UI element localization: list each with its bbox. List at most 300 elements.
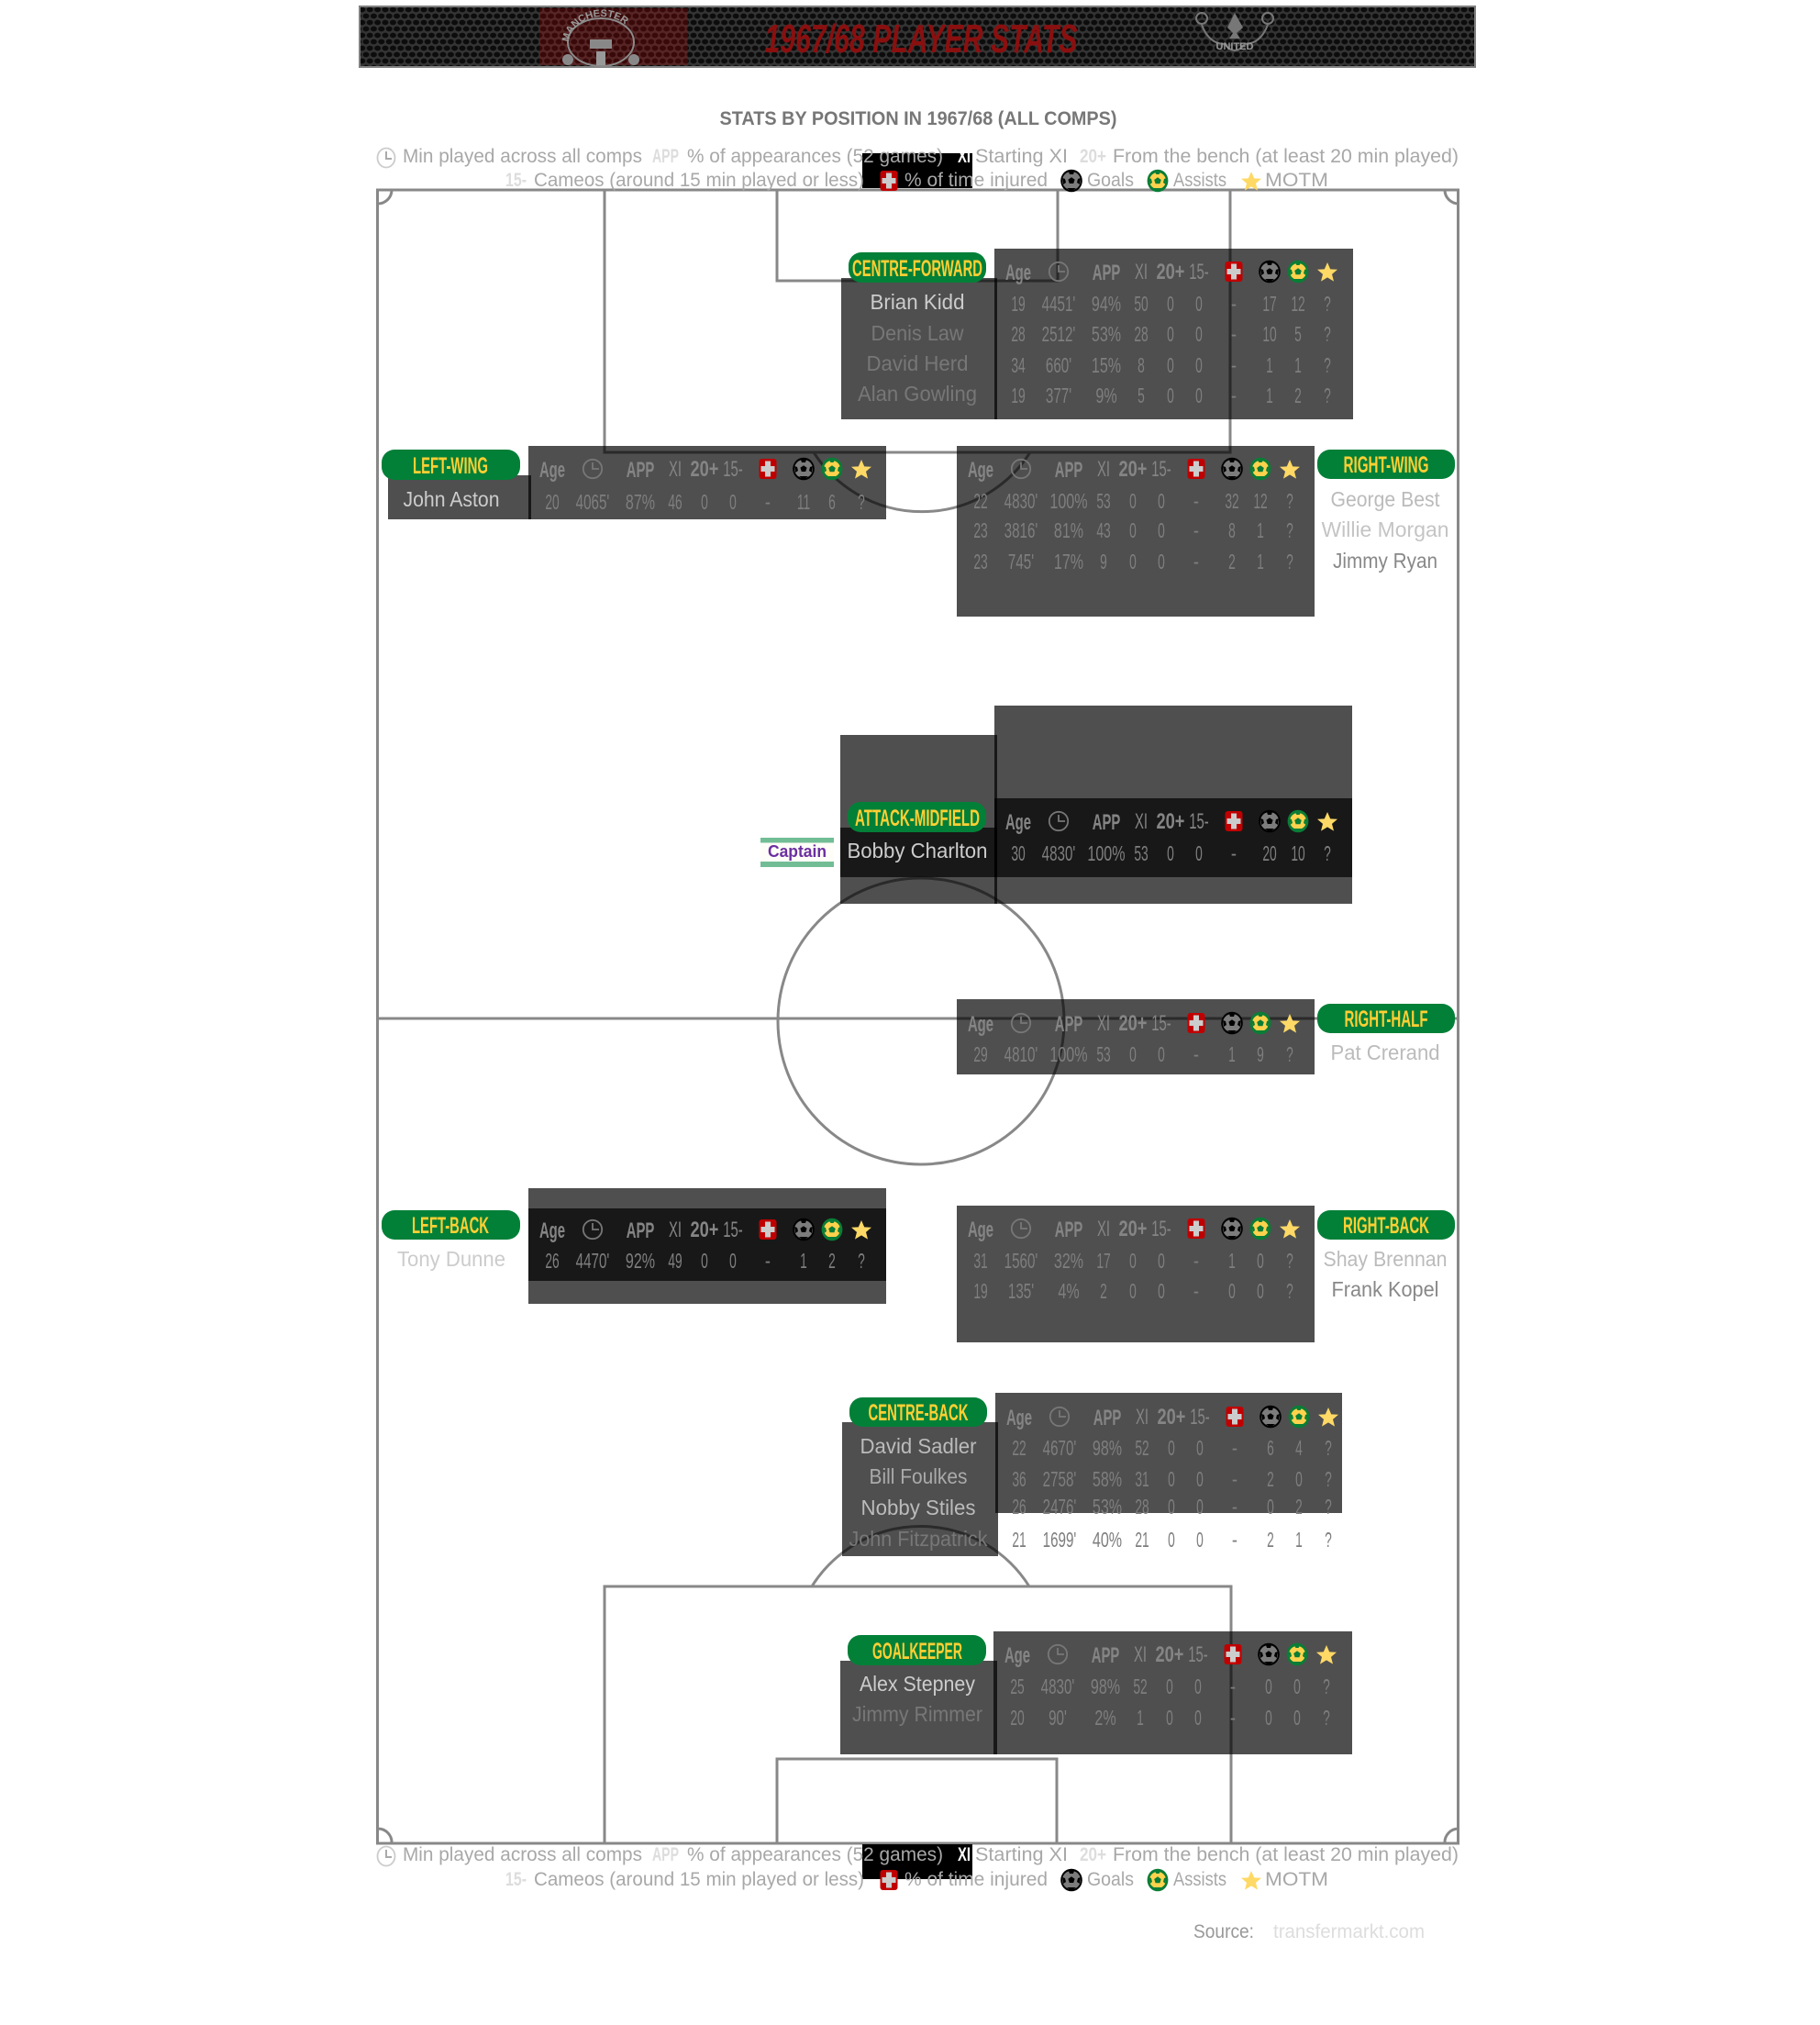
stats rows: 17 xyxy=(1096,1251,1111,1274)
stats row xyxy=(545,1250,865,1274)
stats rows: 0 xyxy=(1167,385,1174,408)
legend: top: Goals xyxy=(1087,170,1134,191)
stats rows: ? xyxy=(1286,491,1293,514)
stats row: 0 xyxy=(729,1251,737,1274)
stats header: 20+ xyxy=(691,1218,718,1242)
legend: top: Starting XI xyxy=(975,146,1068,167)
panel: centre-forward xyxy=(841,249,1353,419)
stats rows: 2758' xyxy=(1043,1468,1076,1492)
stats rows xyxy=(1010,1675,1330,1730)
player names: David Sadler xyxy=(860,1434,977,1458)
stats header: Age xyxy=(968,459,993,483)
legend: top: APP xyxy=(652,146,679,167)
stats header xyxy=(539,1218,871,1243)
stats header: 15- xyxy=(1189,261,1209,284)
stats rows xyxy=(1011,293,1331,408)
stats header xyxy=(1005,809,1337,835)
player names xyxy=(858,290,977,406)
stats rows: 1 xyxy=(1266,385,1273,408)
legend: top: 20+ xyxy=(1080,146,1106,167)
position pill xyxy=(382,1210,520,1240)
stats rows: 0 xyxy=(1195,294,1203,317)
stats header: Age xyxy=(1005,811,1031,835)
stats rows: 100% xyxy=(1049,490,1088,514)
captain badge: Captain xyxy=(768,842,827,861)
stats panel xyxy=(994,249,1353,419)
stats rows: 135' xyxy=(1008,1280,1034,1304)
stats row: 4830' xyxy=(1042,842,1075,866)
stats rows: 0 xyxy=(1195,324,1203,347)
player name: Pat Crerand xyxy=(1330,1040,1440,1064)
stats rows: 22 xyxy=(1012,1438,1027,1461)
icon: United crest xyxy=(1196,13,1273,52)
position pill: LEFT-BACK xyxy=(412,1213,489,1239)
icon: United crest: UNITED xyxy=(1216,41,1254,52)
player names: Bill Foulkes xyxy=(870,1464,967,1488)
stats rows: ? xyxy=(1323,1676,1330,1699)
player names: Jimmy Rimmer xyxy=(852,1702,982,1726)
stats rows: 6 xyxy=(1267,1438,1274,1461)
stats header: APP xyxy=(1055,1013,1082,1037)
stats header: Age xyxy=(968,1218,993,1242)
stats rows: 1 xyxy=(1295,1530,1303,1552)
legend: bottom: APP xyxy=(652,1844,679,1865)
stats rows xyxy=(1012,1437,1332,1552)
legend: bottom: Cameos (around 15 min played or less) xyxy=(534,1869,864,1890)
stats rows: - xyxy=(1232,1529,1237,1552)
stats header: APP xyxy=(1093,811,1120,835)
player names xyxy=(1321,487,1449,573)
stats header xyxy=(968,1217,1300,1242)
stats rows: - xyxy=(1230,1675,1236,1699)
stats header: 20+ xyxy=(1119,1217,1147,1241)
player names: David Herd xyxy=(866,351,969,375)
stats row: 20 xyxy=(1262,843,1277,866)
legend: top: 15- xyxy=(505,170,527,191)
stats rows: 1 xyxy=(1257,551,1264,574)
stats rows: 0 xyxy=(1195,355,1203,378)
stats row: ? xyxy=(1286,1044,1293,1067)
stats header xyxy=(1005,260,1337,285)
source credit: transfermarkt.com xyxy=(1273,1921,1425,1942)
stats row: 1 xyxy=(800,1251,807,1274)
stats rows: 32 xyxy=(1225,491,1239,514)
player names panel xyxy=(388,475,531,519)
position pill xyxy=(848,1635,986,1665)
stats row: 53 xyxy=(1134,843,1149,866)
stats header: XI xyxy=(1135,261,1148,284)
highlight band: name xyxy=(840,828,997,877)
legend: bottom: From the bench (at least 20 min played) xyxy=(1113,1844,1459,1865)
stats rows: ? xyxy=(1286,1251,1293,1274)
stats rows: ? xyxy=(1325,1438,1332,1461)
stats rows: 0 xyxy=(1168,1530,1175,1552)
stats rows: 2 xyxy=(1267,1469,1274,1492)
stats rows: 2512' xyxy=(1042,323,1075,347)
stats row: - xyxy=(1231,842,1237,866)
stats header: 15- xyxy=(1189,810,1209,834)
stats row: - xyxy=(765,491,771,515)
stats rows: ? xyxy=(1324,385,1331,408)
legend: top: % of appearances (52 games) xyxy=(687,146,943,167)
stats rows: 28 xyxy=(1135,1496,1149,1519)
stats rows: 0 xyxy=(1167,355,1174,378)
stats rows: 0 xyxy=(1167,324,1174,347)
legend: top: % of time injured xyxy=(904,170,1048,191)
stats header: APP xyxy=(1092,1644,1119,1668)
stats header: 20+ xyxy=(1119,1011,1147,1036)
stats row: ? xyxy=(858,1251,865,1274)
panel: goalkeeper xyxy=(840,1631,1352,1754)
stats rows: 26 xyxy=(1012,1496,1027,1519)
stats header xyxy=(539,457,871,483)
stats row xyxy=(973,1043,1293,1067)
position pill xyxy=(1317,1210,1455,1240)
legend: top xyxy=(378,146,1459,192)
stats row: 0 xyxy=(1158,1044,1165,1067)
stats rows: 0 xyxy=(1196,1469,1204,1492)
stats rows: 0 xyxy=(1195,385,1203,408)
stats header: XI xyxy=(669,458,682,482)
stats header: 15- xyxy=(1190,1406,1210,1430)
stats panel xyxy=(994,706,1352,904)
stats rows: - xyxy=(1231,323,1237,347)
player names panel xyxy=(841,278,997,419)
stats rows: 1 xyxy=(1266,355,1273,378)
legend: top: MOTM xyxy=(1265,170,1328,191)
stats rows: 0 xyxy=(1158,1281,1165,1304)
stats header: Age xyxy=(539,459,565,483)
stats header xyxy=(1006,1405,1338,1430)
stats rows: 0 xyxy=(1267,1496,1274,1519)
stats header: XI xyxy=(1097,1012,1110,1036)
stats rows: 40% xyxy=(1093,1529,1122,1552)
position pill xyxy=(1317,1004,1455,1033)
icon: Manchester crest xyxy=(561,9,639,67)
stats row: 2 xyxy=(828,1251,836,1274)
stats row: 29 xyxy=(973,1044,988,1067)
stats rows: 2 xyxy=(1267,1530,1274,1552)
stats rows: 2476' xyxy=(1043,1496,1076,1519)
player names xyxy=(849,1434,988,1551)
stats row: ? xyxy=(858,492,865,515)
player names: George Best xyxy=(1330,487,1440,511)
stats rows: 31 xyxy=(1135,1469,1149,1492)
stats rows: 2 xyxy=(1228,551,1236,574)
stats rows: ? xyxy=(1324,355,1331,378)
stats row: 20 xyxy=(545,492,560,515)
stats row: - xyxy=(765,1250,771,1274)
stats rows: 660' xyxy=(1046,354,1071,378)
stats rows: ? xyxy=(1324,294,1331,317)
stats panel xyxy=(528,446,886,519)
stats rows: 34 xyxy=(1011,355,1026,378)
stats rows: 3816' xyxy=(1004,519,1038,543)
stats header: 20+ xyxy=(1158,1405,1185,1430)
position pill: CENTRE-BACK xyxy=(868,1400,969,1426)
player name: Bobby Charlton xyxy=(848,839,987,862)
legend: bottom: 20+ xyxy=(1080,1844,1106,1865)
stats rows: 25 xyxy=(1010,1676,1025,1699)
stats rows xyxy=(973,490,1293,574)
stats rows: 17 xyxy=(1262,294,1277,317)
player names: Alex Stepney xyxy=(860,1672,975,1696)
stats rows: 2% xyxy=(1094,1707,1116,1730)
stats header: XI xyxy=(1097,458,1110,482)
stats header: XI xyxy=(1136,1406,1149,1430)
stats row: 46 xyxy=(668,492,682,515)
legend: top: XI xyxy=(958,146,971,167)
stats header: XI xyxy=(1135,810,1148,834)
stats rows: - xyxy=(1230,1707,1236,1730)
stats header: APP xyxy=(1055,459,1082,483)
stats rows: 0 xyxy=(1196,1496,1204,1519)
stats rows: ? xyxy=(1286,1281,1293,1304)
stats rows: 98% xyxy=(1091,1675,1120,1699)
stats rows: 58% xyxy=(1093,1468,1122,1492)
stats rows: 9 xyxy=(1100,551,1107,574)
legend: bottom: 15- xyxy=(505,1869,527,1890)
stats row: 92% xyxy=(626,1250,655,1274)
stats header: 15- xyxy=(1188,1643,1208,1667)
stats row: 0 xyxy=(1167,843,1174,866)
stats rows: 0 xyxy=(1166,1676,1173,1699)
stats rows: 53% xyxy=(1093,1496,1122,1519)
player names: Alan Gowling xyxy=(858,382,977,406)
stats row: - xyxy=(1193,1043,1199,1067)
stats rows: 10 xyxy=(1262,324,1277,347)
stats rows: ? xyxy=(1325,1530,1332,1552)
stats row: 49 xyxy=(668,1251,682,1274)
legend: bottom: Min played across all comps xyxy=(403,1844,642,1865)
stats header: Age xyxy=(968,1013,993,1037)
stats rows: - xyxy=(1232,1468,1237,1492)
stats row: 100% xyxy=(1087,842,1126,866)
stats rows: 19 xyxy=(1011,294,1026,317)
panel: left-back xyxy=(382,1188,886,1304)
stats row: 0 xyxy=(701,1251,708,1274)
stats header: XI xyxy=(1134,1643,1147,1667)
stats rows: 0 xyxy=(1129,1251,1137,1274)
stats rows: - xyxy=(1232,1496,1237,1519)
stats rows: 0 xyxy=(1228,1281,1236,1304)
stats rows: 0 xyxy=(1158,491,1165,514)
stats panel xyxy=(995,1393,1342,1513)
stats rows: 4% xyxy=(1058,1280,1080,1304)
panel: attack-midfield xyxy=(840,706,1352,904)
legend: bottom: Assists xyxy=(1173,1869,1226,1890)
stats row: 0 xyxy=(729,492,737,515)
legend: bottom xyxy=(378,1844,1459,1891)
stats rows: - xyxy=(1231,354,1237,378)
player names: Nobby Stiles xyxy=(860,1496,976,1519)
stats rows: 0 xyxy=(1265,1708,1272,1730)
stats rows: 81% xyxy=(1054,519,1083,543)
player names panel xyxy=(842,1422,998,1556)
stats rows: 0 xyxy=(1196,1438,1204,1461)
position pill xyxy=(849,252,986,283)
player names: Brian Kidd xyxy=(870,290,965,314)
stats header: APP xyxy=(1093,1407,1121,1430)
stats rows: 0 xyxy=(1295,1469,1303,1492)
panel: right-back xyxy=(957,1206,1455,1342)
stats rows: 2 xyxy=(1295,1496,1303,1519)
stats rows: 31 xyxy=(973,1251,988,1274)
stats rows: 53 xyxy=(1096,491,1111,514)
stats rows: 0 xyxy=(1168,1469,1175,1492)
stats rows: 9% xyxy=(1095,384,1117,408)
stats header: 15- xyxy=(1151,1218,1171,1241)
stats header: Age xyxy=(1005,261,1031,285)
position pill: RIGHT-HALF xyxy=(1345,1007,1427,1032)
legend: top: Cameos (around 15 min played or less) xyxy=(534,170,864,191)
stats rows: ? xyxy=(1324,324,1331,347)
stats header: 15- xyxy=(1151,1012,1171,1036)
panel: left-wing xyxy=(382,446,886,519)
stats row: 30 xyxy=(1011,843,1026,866)
source credit xyxy=(1193,1921,1425,1942)
stats row: 53 xyxy=(1096,1044,1111,1067)
stats row: ? xyxy=(1324,843,1331,866)
stats row: 4065' xyxy=(576,491,609,515)
stats rows: 4 xyxy=(1295,1438,1303,1461)
stats rows: 22 xyxy=(973,491,988,514)
legend: bottom: Starting XI xyxy=(975,1844,1068,1865)
position pill xyxy=(848,802,986,832)
stats rows: 53% xyxy=(1092,323,1121,347)
stats rows: 0 xyxy=(1129,491,1137,514)
stats header: 15- xyxy=(723,1218,743,1242)
player names panel xyxy=(840,735,997,904)
stats header: 20+ xyxy=(1157,809,1184,834)
position pill: GOALKEEPER xyxy=(872,1639,962,1664)
icon: Manchester crest: MANCHESTER xyxy=(561,9,628,41)
stats row: 0 xyxy=(701,492,708,515)
stats rows: ? xyxy=(1325,1469,1332,1492)
stats rows: 52 xyxy=(1135,1438,1149,1461)
stats rows: 2 xyxy=(1100,1281,1107,1304)
stats rows: - xyxy=(1193,519,1199,543)
player name: John Aston xyxy=(404,487,499,511)
legend: bottom: % of time injured xyxy=(904,1869,1048,1890)
stats row: 87% xyxy=(626,491,655,515)
position pill xyxy=(849,1397,987,1427)
player names: John Fitzpatrick xyxy=(849,1527,988,1551)
stats row: 0 xyxy=(1129,1044,1137,1067)
stats rows: - xyxy=(1232,1437,1237,1461)
stats header: 20+ xyxy=(691,457,718,482)
stats rows: 1560' xyxy=(1004,1250,1038,1274)
position pill: ATTACK-MIDFIELD xyxy=(855,806,980,831)
stats rows: 12 xyxy=(1291,294,1305,317)
stats rows: 0 xyxy=(1129,520,1137,543)
stats panel xyxy=(957,1206,1315,1342)
stats rows: ? xyxy=(1323,1708,1330,1730)
stats rows: 0 xyxy=(1293,1676,1301,1699)
highlight band: stats xyxy=(994,798,1352,877)
position pill xyxy=(1317,450,1455,479)
stats rows: 0 xyxy=(1168,1438,1175,1461)
player names: Willie Morgan xyxy=(1321,517,1449,541)
stats rows: 0 xyxy=(1129,551,1137,574)
legend: bottom: % of appearances (52 games) xyxy=(687,1844,943,1865)
stats header: XI xyxy=(1097,1218,1110,1241)
stats rows: 0 xyxy=(1158,520,1165,543)
banner title: 1967/68 PLAYER STATS xyxy=(765,17,1077,61)
stats rows: 23 xyxy=(973,551,988,574)
banner red crest backdrop xyxy=(539,8,688,65)
stats rows: 4830' xyxy=(1004,490,1038,514)
stats row: 9 xyxy=(1257,1044,1264,1067)
position pill: LEFT-WING xyxy=(413,453,488,479)
stats rows: 21 xyxy=(1012,1530,1027,1552)
stats rows: 19 xyxy=(973,1281,988,1304)
stats rows: 4830' xyxy=(1041,1675,1074,1699)
stats rows: 4670' xyxy=(1043,1437,1076,1461)
stats rows: 0 xyxy=(1194,1708,1202,1730)
stats rows: 17% xyxy=(1054,551,1083,574)
stats rows: 5 xyxy=(1294,324,1302,347)
stats rows: 8 xyxy=(1228,520,1236,543)
stats rows: 4451' xyxy=(1042,293,1075,317)
stats rows xyxy=(973,1250,1293,1304)
stats header xyxy=(1004,1642,1337,1668)
stats rows: ? xyxy=(1325,1496,1332,1519)
stats rows: 0 xyxy=(1196,1530,1204,1552)
stats header: 20+ xyxy=(1156,1642,1183,1667)
stats row: 0 xyxy=(1195,843,1203,866)
stats row: 1 xyxy=(1228,1044,1236,1067)
stats rows: - xyxy=(1193,1250,1199,1274)
player names: Frank Kopel xyxy=(1332,1277,1438,1301)
panel: right-wing xyxy=(957,446,1455,617)
stats header xyxy=(968,1011,1300,1037)
legend: top: Assists xyxy=(1173,170,1226,191)
legend: bottom: XI xyxy=(958,1844,971,1865)
stats row: 10 xyxy=(1291,843,1305,866)
captain badge xyxy=(760,838,834,867)
stats header: 20+ xyxy=(1119,457,1147,482)
position pill: RIGHT-WING xyxy=(1343,452,1429,478)
stats rows: 5 xyxy=(1138,385,1145,408)
player names: Denis Law xyxy=(871,321,964,345)
stats header: 15- xyxy=(723,458,743,482)
position pill: RIGHT-BACK xyxy=(1343,1213,1429,1239)
stats rows: 0 xyxy=(1194,1676,1202,1699)
stats rows: 0 xyxy=(1129,1281,1137,1304)
legend black block xyxy=(862,153,972,188)
stats rows: 0 xyxy=(1168,1496,1175,1519)
player names xyxy=(1323,1247,1448,1301)
stats rows: 36 xyxy=(1012,1469,1027,1492)
stats rows: - xyxy=(1231,293,1237,317)
stats rows: 23 xyxy=(973,520,988,543)
stats header: 15- xyxy=(1151,458,1171,482)
stats row: 11 xyxy=(797,492,810,515)
stats rows: 1 xyxy=(1137,1708,1144,1730)
legend black block xyxy=(862,1844,972,1879)
stats rows: 377' xyxy=(1046,384,1071,408)
stats rows: 32% xyxy=(1054,1250,1083,1274)
stats rows: 1699' xyxy=(1043,1529,1076,1552)
stats header: XI xyxy=(669,1218,682,1242)
stats rows: 1 xyxy=(1257,520,1264,543)
player names: Shay Brennan xyxy=(1323,1247,1448,1271)
stats rows: 52 xyxy=(1133,1676,1148,1699)
stats rows: 90' xyxy=(1049,1707,1067,1730)
stats rows: 43 xyxy=(1096,520,1111,543)
stats header: Age xyxy=(1004,1644,1030,1668)
